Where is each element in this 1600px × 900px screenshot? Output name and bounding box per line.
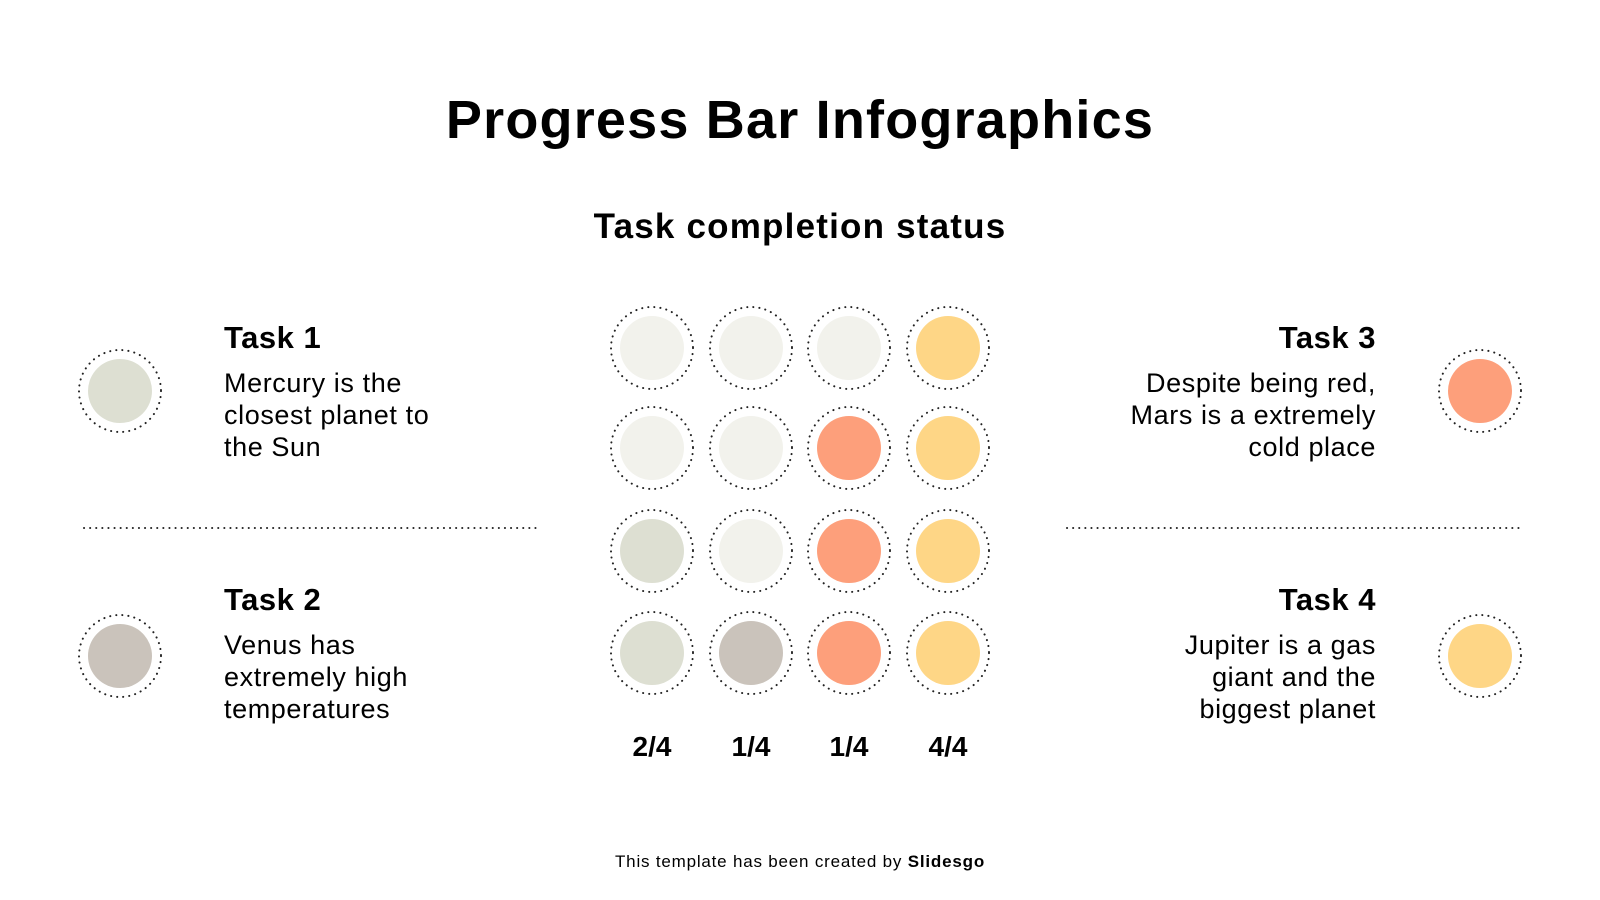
text: task 2: Venus has bbox=[224, 630, 356, 660]
text: task 4: Jupiter is a gas bbox=[1185, 630, 1376, 660]
icon: task 4 circle bbox=[1438, 614, 1522, 698]
column 2 bbox=[710, 307, 792, 694]
icon: task 3 circle bbox=[1438, 349, 1522, 433]
labels: fractions: 4/4 bbox=[929, 731, 968, 762]
labels: fractions: 1/4 bbox=[732, 731, 771, 762]
heading: task 2: Task 2 bbox=[224, 582, 321, 617]
heading: task 4: Task 4 bbox=[1279, 582, 1376, 617]
text: task 4: biggest planet bbox=[1199, 694, 1376, 724]
column 4 bbox=[907, 307, 989, 694]
column 1 bbox=[611, 307, 693, 694]
text: task 3: Mars is a extremely bbox=[1131, 400, 1376, 430]
labels: fractions bbox=[633, 731, 968, 762]
heading: task 3: Task 3 bbox=[1279, 320, 1376, 355]
panel: task 2 bbox=[78, 582, 408, 724]
heading: task 1: Task 1 bbox=[224, 320, 321, 355]
text: task 3 bbox=[1131, 368, 1376, 462]
icon: task 1 circle bbox=[78, 349, 162, 433]
footer credit: This template has been created by Slidesgo bbox=[615, 852, 985, 871]
text: task 4 bbox=[1185, 630, 1376, 724]
text: task 3: cold place bbox=[1248, 432, 1376, 462]
panel: task 3 bbox=[1131, 320, 1522, 462]
panel: task 4 bbox=[1185, 582, 1522, 724]
title: Progress Bar Infographics bbox=[446, 90, 1154, 150]
chart: progress grid bbox=[610, 306, 990, 762]
icon: task 2 circle bbox=[78, 614, 162, 698]
labels: fractions: 1/4 bbox=[830, 731, 869, 762]
text: task 3: Despite being red, bbox=[1146, 368, 1376, 398]
subtitle: Task completion status bbox=[594, 207, 1006, 246]
text: task 4: giant and the bbox=[1212, 662, 1376, 692]
labels: fractions: 2/4 bbox=[633, 731, 672, 762]
text: task 2: temperatures bbox=[224, 694, 390, 724]
column 3 bbox=[808, 307, 890, 694]
text: task 2: extremely high bbox=[224, 662, 408, 692]
panel: task 1 bbox=[78, 320, 429, 462]
text: task 1 bbox=[224, 368, 429, 462]
text: task 2 bbox=[224, 630, 408, 724]
text: task 1: closest planet to bbox=[224, 400, 429, 430]
text: task 1: Mercury is the bbox=[224, 368, 402, 398]
text: task 1: the Sun bbox=[224, 432, 321, 462]
